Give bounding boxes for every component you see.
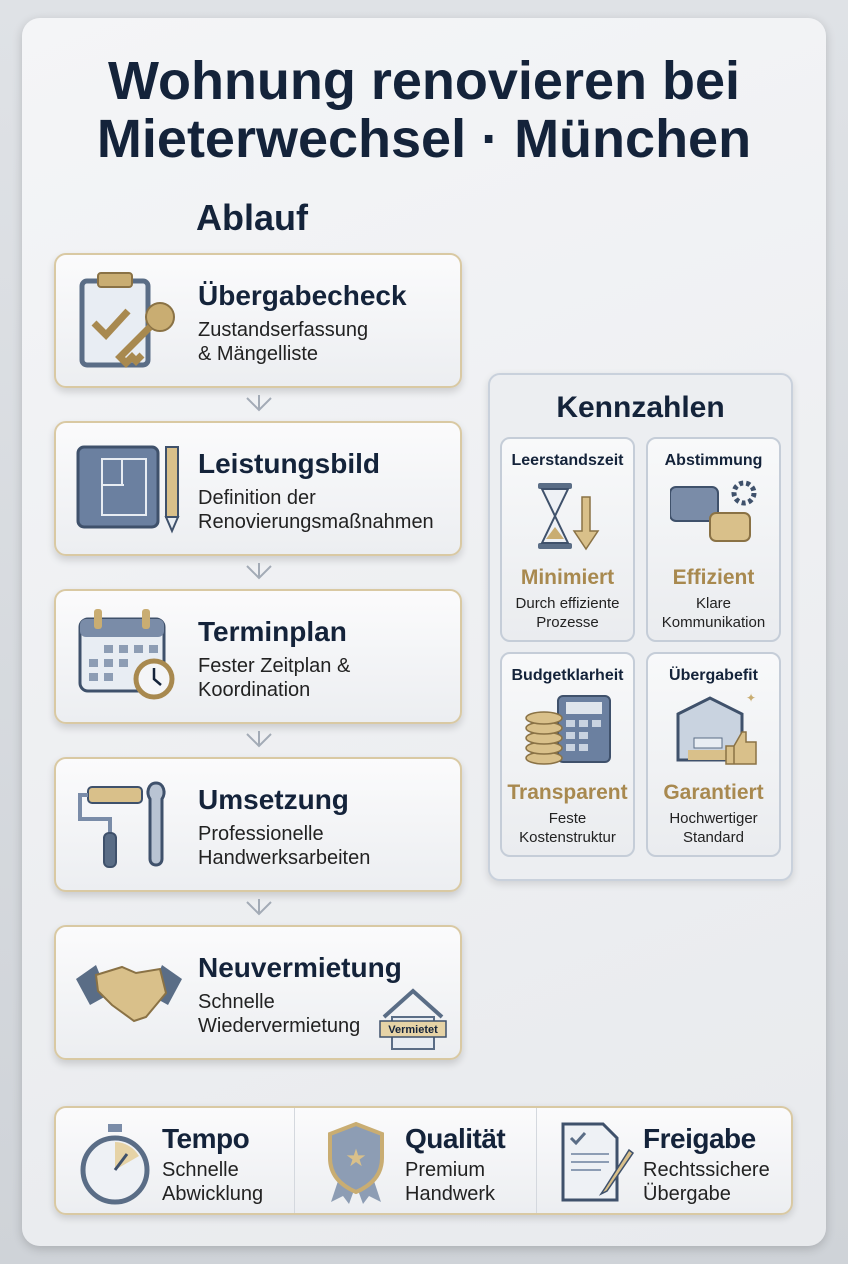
icon: room with thumbs up bbox=[676, 691, 757, 765]
footer item: Freigabe bbox=[536, 1108, 791, 1213]
heading: Kennzahlen: Kennzahlen bbox=[556, 391, 725, 424]
heading: Ablauf: Ablauf bbox=[196, 197, 308, 238]
icon: chat bubbles gear bbox=[670, 480, 756, 542]
icon: blueprint and pencil bbox=[76, 446, 180, 534]
step 4: Umsetzung bbox=[54, 757, 462, 892]
icon: clipboard with key bbox=[80, 272, 175, 368]
step 5: Neuvermietung: Schnelle bbox=[198, 991, 275, 1013]
step 4: Umsetzung: Professionelle bbox=[198, 823, 324, 845]
kpi: Budgetklarheit: Budgetklarheit bbox=[511, 667, 624, 684]
kpi: Leerstandszeit: Durch effiziente bbox=[516, 595, 619, 612]
footer bar bbox=[54, 1106, 793, 1215]
step 3: Terminplan bbox=[54, 589, 462, 724]
kpi: Budgetklarheit: Kostenstruktur bbox=[519, 829, 616, 846]
kpi: Budgetklarheit: Feste bbox=[549, 810, 586, 827]
step 5: Neuvermietung: Wiedervermietung bbox=[198, 1015, 360, 1037]
step 2: Leistungsbild: Leistungsbild bbox=[198, 448, 380, 479]
icon: shield with star bbox=[328, 1122, 384, 1204]
step 3: Terminplan: Terminplan bbox=[198, 616, 347, 647]
icon: hourglass down arrow bbox=[538, 483, 600, 550]
kpi: Leerstandszeit bbox=[500, 437, 635, 642]
footer item: Tempo bbox=[80, 1123, 263, 1205]
icon: signed document bbox=[562, 1122, 634, 1202]
footer item: Freigabe: Rechtssichere bbox=[643, 1159, 770, 1181]
kpi: Leerstandszeit: Leerstandszeit bbox=[511, 452, 624, 469]
kpi: Budgetklarheit: Transparent bbox=[507, 781, 628, 804]
icon: room with thumbs up: ✦ bbox=[746, 691, 756, 705]
title bbox=[97, 51, 751, 169]
icon: shield with star: ★ bbox=[345, 1145, 367, 1172]
footer item: Tempo: Schnelle bbox=[162, 1159, 239, 1181]
icon: paint roller and wrench bbox=[78, 782, 166, 868]
footer item: Freigabe: Freigabe bbox=[643, 1123, 756, 1154]
icon: handshake bbox=[76, 965, 182, 1022]
kpi: Abstimmung: Abstimmung bbox=[665, 452, 762, 469]
icon: stopwatch bbox=[80, 1124, 150, 1204]
footer item: Qualität: Handwerk bbox=[405, 1183, 495, 1205]
kpi: Übergabefit: Übergabefit bbox=[669, 667, 758, 684]
step 4: Umsetzung: Umsetzung bbox=[198, 784, 349, 815]
kpi: Abstimmung: Effizient bbox=[673, 566, 754, 589]
step 3: Terminplan: Fester Zeitplan & bbox=[198, 655, 350, 677]
kpi: Übergabefit: Garantiert bbox=[663, 781, 764, 804]
title: Wohnung renovieren bei bbox=[108, 51, 740, 111]
footer item: Qualität: Premium bbox=[405, 1159, 485, 1181]
step 1: Übergabecheck: Übergabecheck bbox=[198, 280, 407, 311]
icon: house with Vermietet sign bbox=[379, 988, 447, 1050]
arrow bbox=[246, 395, 272, 412]
step 4: Umsetzung: Handwerksarbeiten bbox=[198, 847, 370, 869]
kpi: Übergabefit: Hochwertiger bbox=[669, 810, 758, 827]
step 2: Leistungsbild: Definition der bbox=[198, 487, 316, 509]
icon: house with Vermietet sign: Vermietet bbox=[388, 1024, 438, 1036]
arrow bbox=[246, 731, 272, 748]
footer item: Tempo: Tempo bbox=[162, 1123, 249, 1154]
panel: Kennzahlen bbox=[488, 373, 793, 881]
title: Mieterwechsel · München bbox=[97, 109, 751, 169]
footer item: Freigabe: Übergabe bbox=[643, 1183, 731, 1205]
kpi: Leerstandszeit: Minimiert bbox=[521, 566, 614, 589]
footer item: Qualität: Qualität bbox=[405, 1123, 505, 1154]
kpi: Übergabefit bbox=[646, 652, 781, 857]
kpi: Leerstandszeit: Prozesse bbox=[536, 614, 599, 631]
kpi: Abstimmung: Kommunikation bbox=[662, 614, 765, 631]
step 1: Übergabecheck bbox=[54, 253, 462, 388]
icon: coins calculator bbox=[525, 695, 611, 765]
kpi: Abstimmung: Klare bbox=[696, 595, 731, 612]
kpi: Budgetklarheit bbox=[500, 652, 635, 857]
step 5: Neuvermietung: Neuvermietung bbox=[198, 952, 402, 983]
footer item: Qualität bbox=[294, 1108, 536, 1213]
step 3: Terminplan: Koordination bbox=[198, 679, 310, 701]
step 5: Neuvermietung bbox=[54, 925, 462, 1060]
step 2: Leistungsbild bbox=[54, 421, 462, 556]
kpi: Übergabefit: Standard bbox=[683, 829, 744, 846]
arrow bbox=[246, 563, 272, 580]
step 2: Leistungsbild: Renovierungsmaßnahmen bbox=[198, 511, 434, 533]
step 1: Übergabecheck: Zustandserfassung bbox=[198, 319, 368, 341]
step 1: Übergabecheck: & Mängelliste bbox=[198, 343, 318, 365]
footer item: Tempo: Abwicklung bbox=[162, 1183, 263, 1205]
kpi: Abstimmung bbox=[646, 437, 781, 642]
icon: calendar with clock bbox=[78, 609, 174, 700]
arrow bbox=[246, 899, 272, 916]
